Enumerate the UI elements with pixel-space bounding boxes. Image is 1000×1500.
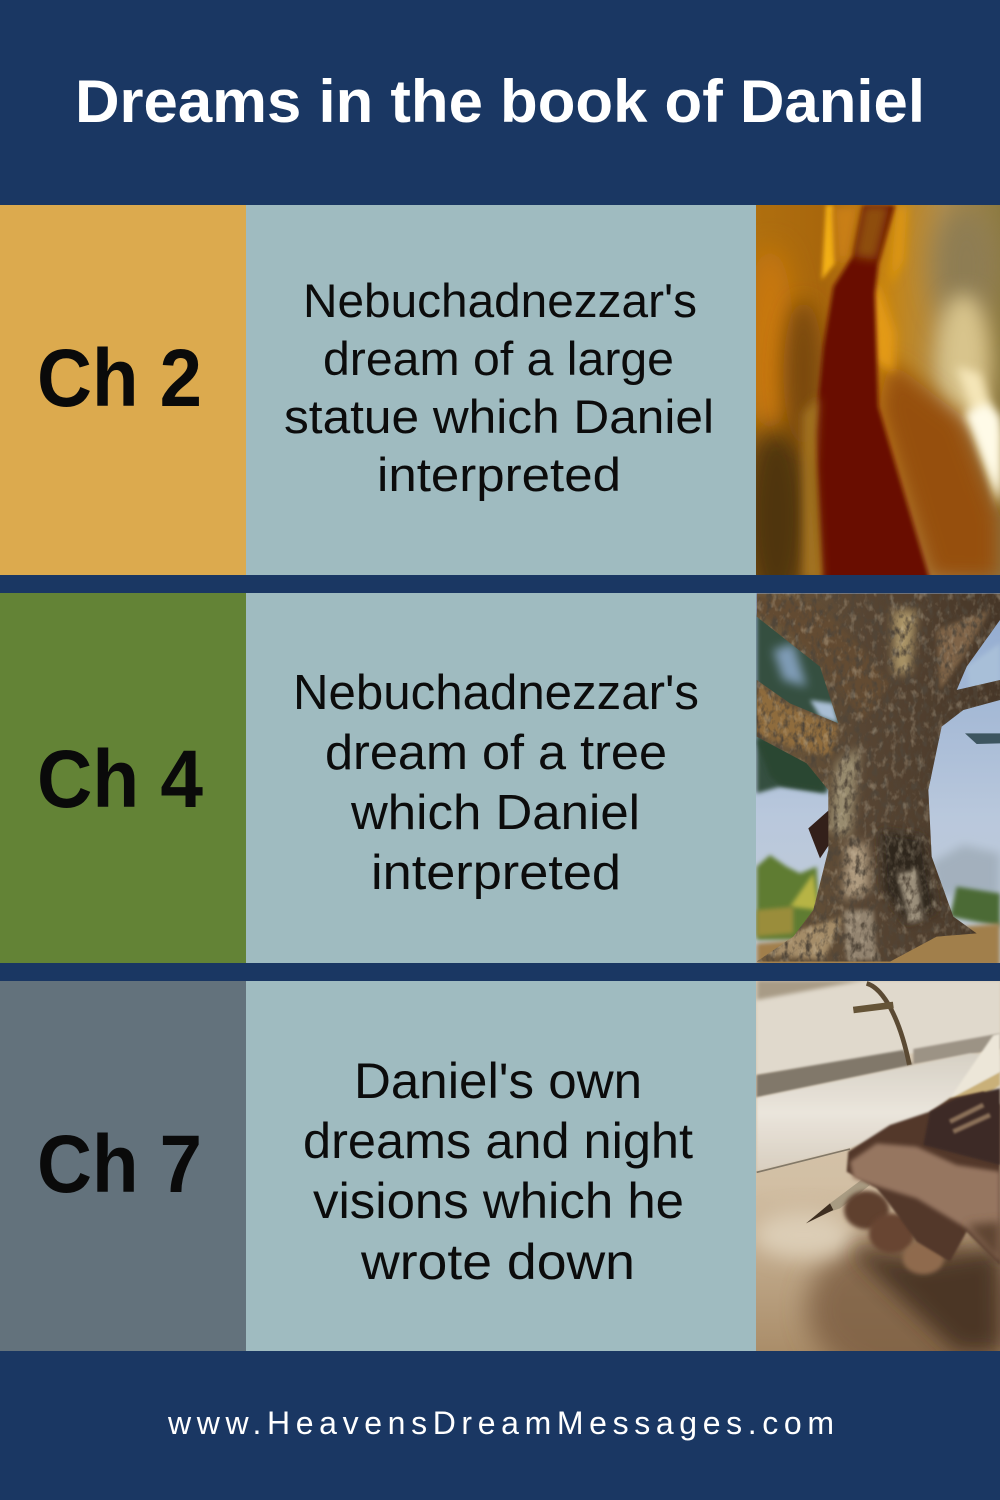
chapter 4 description: interpreted: [371, 846, 621, 900]
chapter 2 description: Nebuchadnezzar's: [303, 274, 697, 327]
chapter 2 colour block: [0, 205, 246, 575]
chapter 7 description: dreams and night: [303, 1113, 693, 1169]
image: large tree: [750, 590, 1000, 970]
top scroll: [757, 982, 1000, 1075]
second scroll: [757, 1053, 1000, 1172]
chapter 7 description: [303, 1053, 693, 1290]
shadow under hand: [850, 1248, 1000, 1352]
panel: chapter 4: [0, 590, 1000, 970]
hand: [844, 1191, 889, 1229]
chapter 2 description: [284, 274, 714, 501]
chapter 4 description: which Daniel: [350, 786, 640, 840]
chapter 4 description panel: [246, 593, 756, 963]
chapter 2 description: interpreted: [377, 448, 621, 501]
chapter 7 description panel: [246, 981, 756, 1351]
chapter 4 description: [293, 666, 699, 900]
footer website address: www.HeavensDreamMessages.com: [167, 1405, 834, 1441]
chapter 7 description: Daniel's own: [354, 1053, 642, 1109]
chapter 4 label: Ch 4: [37, 734, 203, 825]
title: Dreams in the book of Daniel: [75, 68, 925, 135]
panel: chapter 7: [0, 981, 1000, 1351]
quill: [946, 1072, 1000, 1102]
tree trunk and branches: [750, 590, 1000, 970]
chapter 2 description: statue which Daniel: [284, 390, 714, 443]
chapter 4 colour block: [0, 593, 246, 963]
chapter 7 colour block: [0, 981, 246, 1351]
image: hand writing with quill beside scrolls: [756, 981, 1000, 1351]
chapter 7 description: visions which he: [313, 1173, 684, 1229]
chapter 4 description: Nebuchadnezzar's: [293, 666, 699, 720]
chapter 7 label: Ch 7: [37, 1119, 202, 1210]
image: golden statue: [756, 205, 1000, 575]
chapter 7 description: wrote down: [360, 1234, 635, 1290]
chapter 2 description: dream of a large: [323, 332, 674, 385]
panel: chapter 2: [0, 205, 1000, 575]
chapter 2 label: Ch 2: [37, 333, 202, 424]
chapter 4 description: dream of a tree: [325, 726, 667, 780]
chapter 2 description panel: [246, 205, 756, 575]
